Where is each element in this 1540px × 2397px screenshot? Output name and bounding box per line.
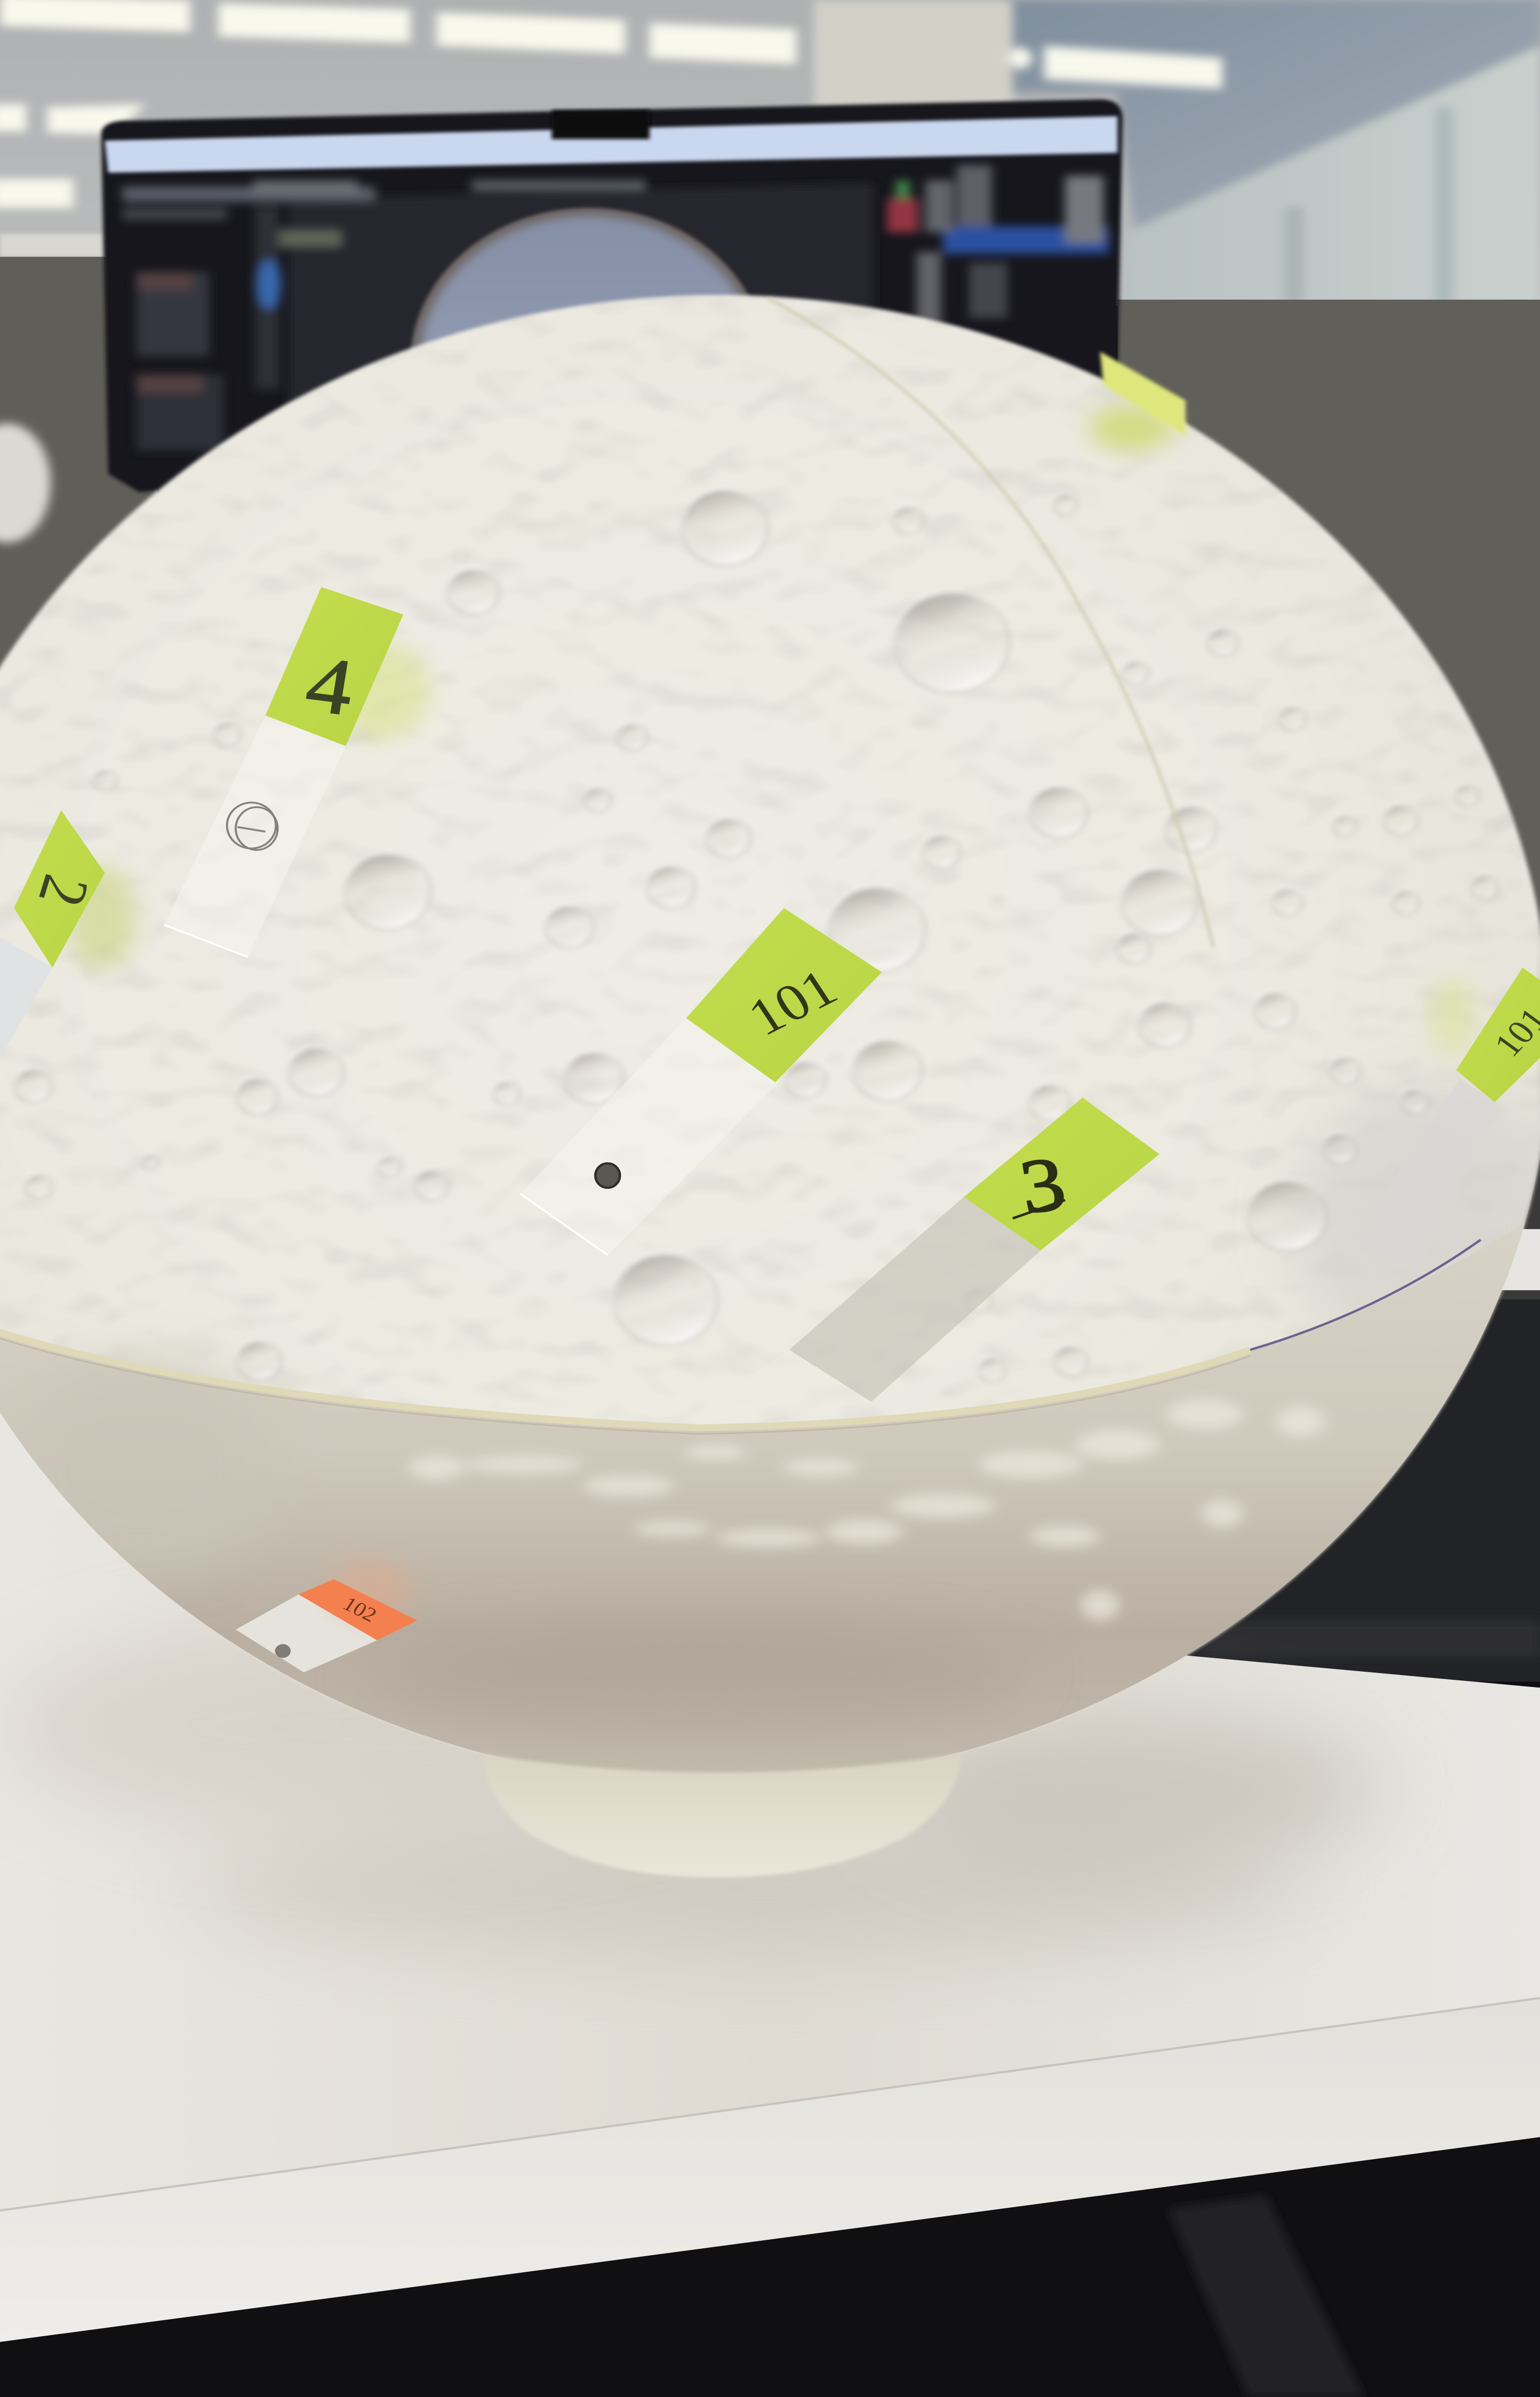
marker 101: pencil hole: [595, 1164, 620, 1188]
desk front edge: [0, 1998, 1540, 2342]
marker 3: handwritten number: 3: [1014, 1140, 1071, 1230]
monitor: [101, 99, 1123, 520]
marker 101: handwritten number: 101: [738, 958, 847, 1047]
floor under desk: [0, 2137, 1540, 2397]
marker 101: tape, hole and note: [521, 908, 882, 1255]
background: ceiling: [0, 0, 1540, 306]
surface bump texture: [0, 291, 1540, 1452]
marker 2: handwritten number: 2: [24, 868, 104, 913]
marker 2: green note: [14, 810, 105, 967]
background: cubicle partitions: [0, 257, 1540, 1682]
marker right edge: green note: [1456, 967, 1540, 1102]
marker 3: tape and note: [695, 1098, 1159, 1422]
marker top right: green note: [1089, 351, 1186, 451]
monitor: moon on screen: [410, 208, 766, 520]
lower left smooth area: [0, 1361, 279, 1574]
marker orange: note glow: [328, 1559, 412, 1620]
marker orange: writing: 102: [339, 1592, 381, 1626]
marker 2: tape and note: [0, 810, 136, 1058]
marker right edge: glow: [1428, 977, 1477, 1056]
background: light band left: [0, 234, 105, 257]
monitor screen dark panel: [288, 184, 873, 443]
lower center dark area: [367, 1619, 1030, 1729]
background: pillar: [814, 0, 1013, 110]
marker 4: tape edge highlight: [164, 925, 248, 957]
desk leg: [1168, 2195, 1364, 2397]
marker 4: pencil circled hole: [227, 803, 278, 850]
globe lower hemisphere: [0, 1192, 1540, 1804]
lower hemisphere bright lumpy terrain: [408, 1399, 1325, 1620]
equator seam band: [0, 1327, 1250, 1428]
marker 4: green note glow: [332, 642, 429, 740]
marker 4: green note: [266, 587, 404, 746]
marker 2: note glow: [66, 865, 136, 969]
meridian seam line: [768, 298, 1214, 948]
ceiling lights: [0, 0, 1222, 208]
equator shadow line: [0, 1333, 1250, 1434]
equator pencil line: [1250, 1240, 1481, 1350]
globe shadow on desk: [192, 1819, 1309, 1957]
marker 4: tape, hole and note: [164, 587, 429, 957]
moon globe: [0, 291, 1540, 1804]
desk surface: [0, 1480, 1540, 2211]
marker orange: hole: [275, 1644, 291, 1658]
marker orange: tape, hole and note: [236, 1559, 417, 1673]
marker 3: underline: [1013, 1200, 1065, 1218]
monitor: interface panels: [122, 165, 1109, 451]
globe stand base: [480, 1754, 962, 1877]
marker orange: note: [299, 1579, 417, 1641]
marker 101: green note: [686, 908, 882, 1082]
marker right edge: tape and note: [1353, 967, 1540, 1269]
monitor notch: [552, 110, 649, 139]
lunar craters: [14, 489, 1498, 1382]
globe sphere body: [0, 295, 1540, 1784]
background: slate ceiling and right wall: [1004, 0, 1540, 314]
marker 3: green note: [964, 1098, 1159, 1250]
lower-right grey shading: [1292, 1085, 1540, 1361]
marker 101: tape edge highlight: [521, 1194, 608, 1255]
marker 4: handwritten number: 4: [301, 639, 359, 732]
monitor screen title bar: [105, 116, 1117, 173]
